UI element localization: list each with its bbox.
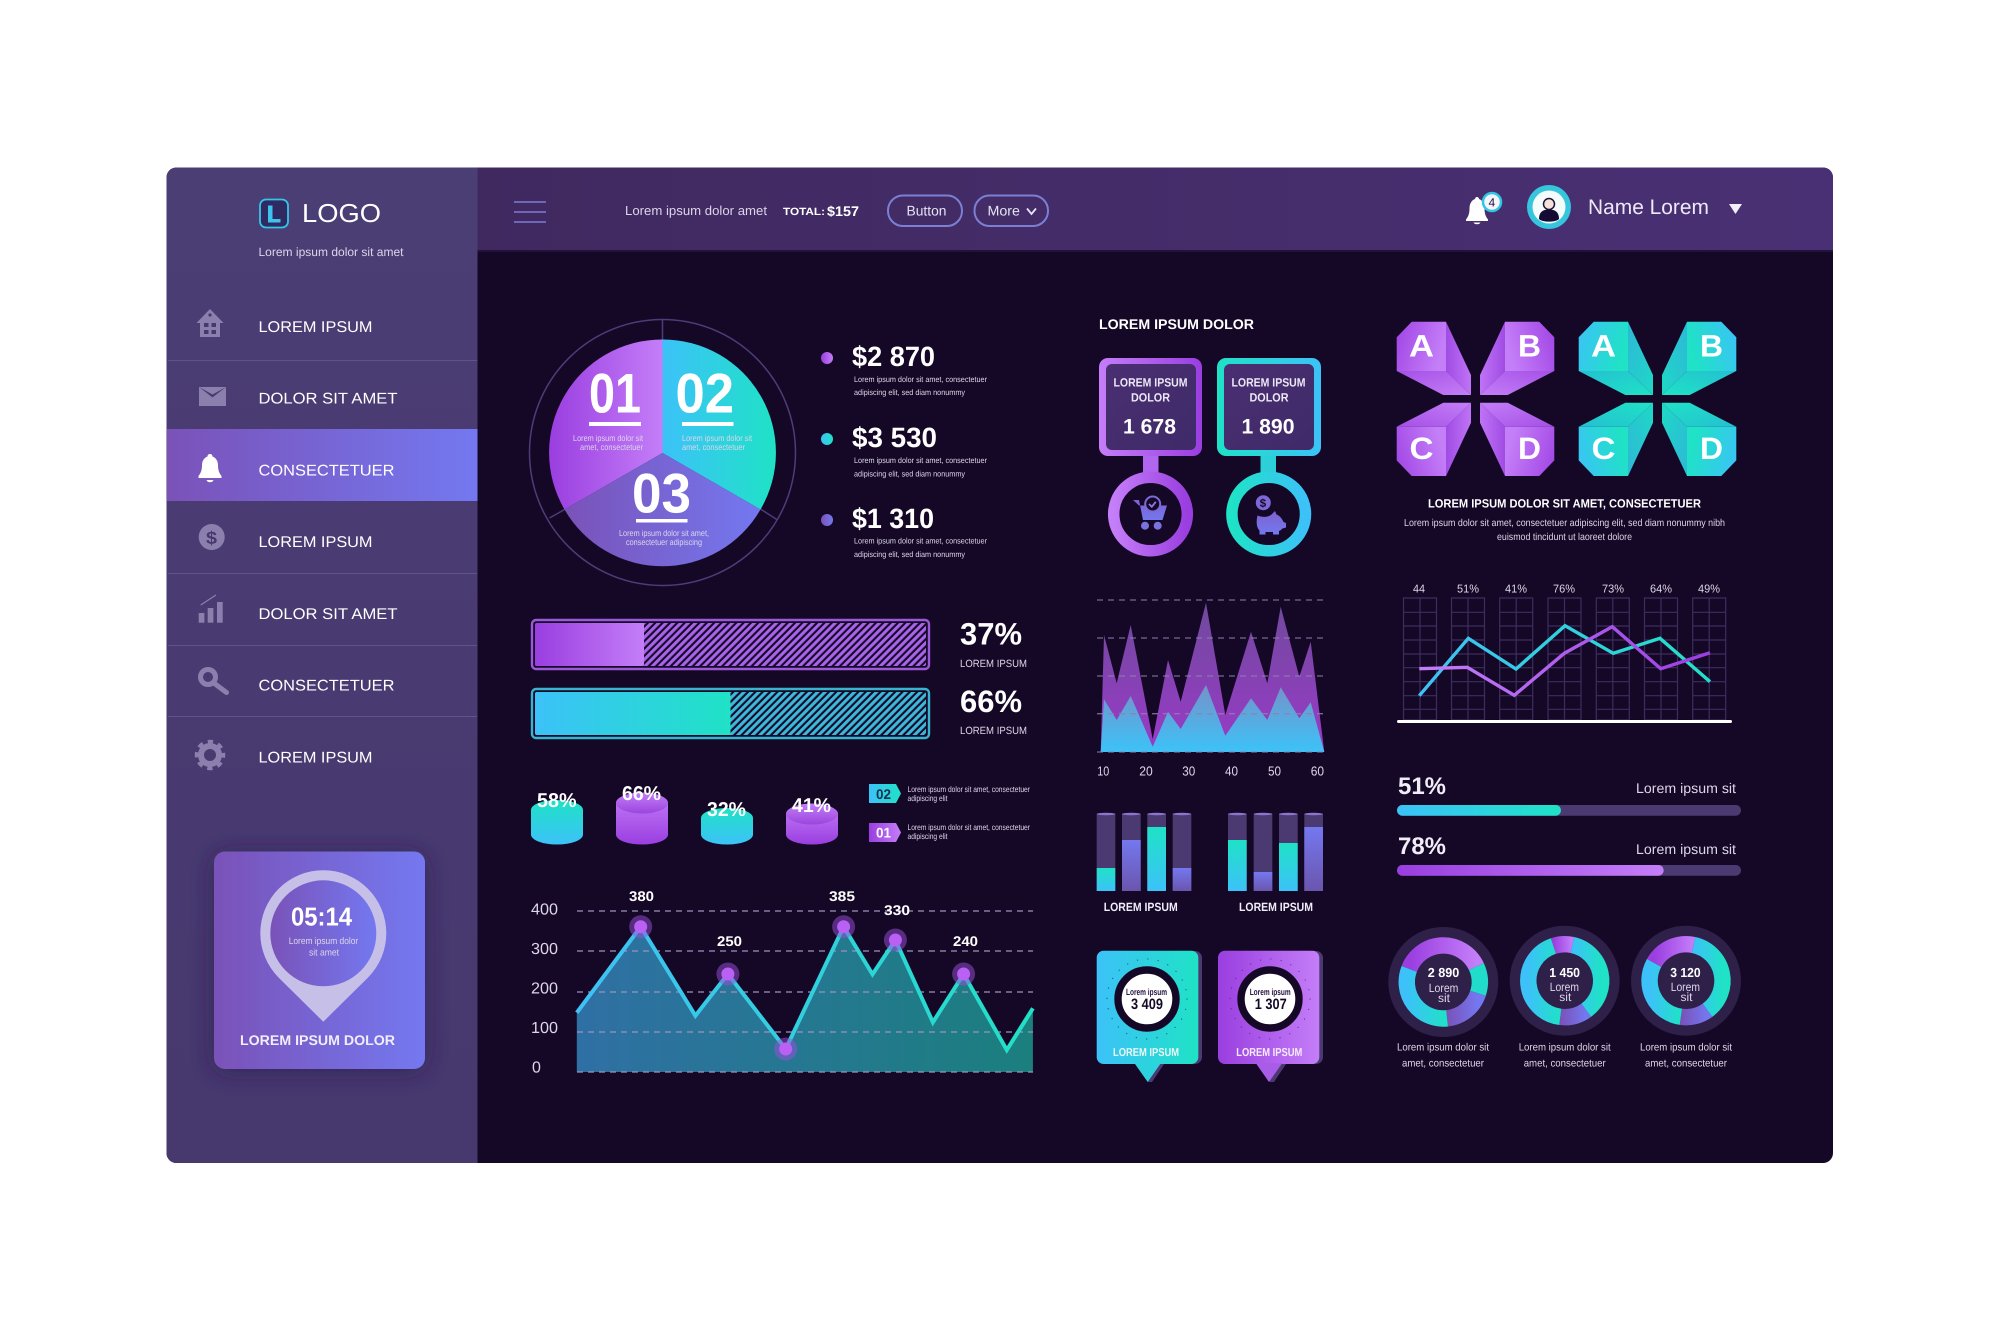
stat card: 1 678: LOREM IPSUM xyxy=(1114,376,1188,390)
pie legend: Lorem ipsum dolor sit amet, consectetuer xyxy=(854,375,987,384)
purple ABCD clover: C xyxy=(1410,431,1434,466)
slim progress: 51%: 51% xyxy=(1398,773,1446,800)
stat card: 1 678: 1 678 xyxy=(1123,416,1176,438)
donut chart: 1 450: Lorem ipsum dolor sit xyxy=(1519,1042,1611,1054)
line chart with area: 200 xyxy=(531,980,558,998)
grid line chart: 51% xyxy=(1457,584,1479,596)
cylinder 41% xyxy=(786,795,838,845)
icon: bell xyxy=(198,454,222,482)
cylinder 58%: 58% xyxy=(537,790,577,812)
pie legend: $3 530 xyxy=(852,422,937,453)
panel: dashboard shell xyxy=(166,167,1834,1163)
active menu highlight xyxy=(167,429,478,501)
icon: magnifier xyxy=(200,670,226,692)
progress bar: 37% xyxy=(532,616,1027,670)
area chart: 30 xyxy=(1182,764,1195,778)
pie slice 03 xyxy=(564,453,760,566)
donut chart: 2 890: Lorem ipsum dolor sit xyxy=(1397,1042,1489,1054)
purple ABCD clover: B xyxy=(1518,328,1541,364)
icon: gear xyxy=(197,742,223,768)
teal ABCD clover: C xyxy=(1592,431,1616,466)
line chart with area: 240 xyxy=(953,933,978,949)
donut chart: 3 120: Lorem ipsum dolor sit xyxy=(1640,1042,1732,1054)
pie chart xyxy=(530,320,796,586)
line chart with area: 100 xyxy=(531,1020,558,1037)
pin card: 1 307: 1 307 xyxy=(1255,996,1287,1013)
progress bar: 66%: 66% xyxy=(960,684,1022,719)
cylinder legend xyxy=(869,784,1030,842)
area chart: 60 xyxy=(1311,764,1324,778)
cylinder legend: adipiscing elit xyxy=(908,832,948,841)
bar group 1: LOREM IPSUM xyxy=(1104,900,1178,914)
stat card: 1 678 xyxy=(1099,358,1202,551)
more dropdown button xyxy=(974,196,1048,226)
donut chart: 3 120: 3 120 xyxy=(1670,965,1701,980)
line chart with area: 0 xyxy=(532,1060,541,1076)
icon: envelope xyxy=(199,387,226,406)
area chart: 40 xyxy=(1225,764,1238,778)
cylinder legend: 01 xyxy=(876,824,891,840)
pin card: 3 409: LOREM IPSUM xyxy=(1113,1047,1179,1059)
purple ABCD clover xyxy=(1397,322,1554,476)
line chart with area: 300 xyxy=(531,941,558,958)
sidebar menu xyxy=(167,309,478,768)
progress bar: 66%: LOREM IPSUM xyxy=(960,725,1027,737)
panel: timer pin card: Lorem ipsum dolor xyxy=(289,936,358,947)
icon: user avatar xyxy=(1527,185,1571,229)
pie legend: Lorem ipsum dolor sit amet, consectetuer xyxy=(854,536,987,546)
grid line chart: 76% xyxy=(1553,584,1575,596)
stat card: 1 890: LOREM IPSUM xyxy=(1232,376,1306,390)
line chart with area xyxy=(531,888,1033,1076)
bar group 2: LOREM IPSUM xyxy=(1239,900,1313,914)
pin card: 3 409: Lorem ipsum xyxy=(1126,987,1167,997)
cylinder 58% xyxy=(531,790,583,845)
pie legend: adipiscing elit, sed diam nonummy xyxy=(854,388,965,397)
menu labels xyxy=(258,319,398,766)
header controls: Name Lorem xyxy=(1588,196,1709,219)
dashboard infographic xyxy=(166,168,1833,1163)
pie chart: amet, consectetuer xyxy=(682,442,745,452)
progress bar: 37%: 37% xyxy=(960,616,1022,652)
pin card: 1 307: LOREM IPSUM xyxy=(1236,1047,1302,1059)
menu labels: LOREM IPSUM xyxy=(258,319,372,336)
donut chart: 2 890: amet, consectetuer xyxy=(1402,1058,1484,1070)
line chart with area: 380 xyxy=(629,888,654,904)
icon: dollar coin xyxy=(199,524,225,550)
slim progress: 78% xyxy=(1397,833,1741,876)
cylinder chart xyxy=(531,783,838,845)
pie chart: Lorem ipsum dolor sit amet, xyxy=(619,528,709,538)
slim progress: 78%: 78% xyxy=(1398,833,1446,860)
dropdown arrow xyxy=(1729,204,1742,214)
cylinder 41%: 41% xyxy=(792,795,831,817)
cylinder 66%: 66% xyxy=(622,783,661,805)
stat card: 1 890 xyxy=(1217,358,1321,551)
pie legend: adipiscing elit, sed diam nonummy xyxy=(854,550,965,559)
menu labels: CONSECTETUER xyxy=(258,462,394,480)
donut chart: 3 120 xyxy=(1631,926,1741,1070)
grid line chart: 49% xyxy=(1698,584,1720,596)
icon: notification bell xyxy=(1466,193,1501,224)
pin card: 1 307 xyxy=(1218,951,1323,1082)
logo: Lorem ipsum dolor sit amet xyxy=(258,245,404,259)
panel: timer pin card: LOREM IPSUM DOLOR xyxy=(240,1032,395,1048)
stat card: 1 890: DOLOR xyxy=(1250,390,1289,404)
cylinder legend: adipiscing elit xyxy=(908,794,948,803)
area chart: 10 xyxy=(1097,764,1109,778)
icon: hamburger menu xyxy=(514,201,546,223)
pie legend xyxy=(821,341,987,559)
area chart: 50 xyxy=(1268,764,1281,778)
panel: timer pin card xyxy=(214,852,425,1069)
logo: LOGO xyxy=(302,198,381,228)
logo xyxy=(258,198,404,259)
cylinder legend: Lorem ipsum dolor sit amet, consectetuer xyxy=(908,785,1030,794)
donut chart: 3 120: Lorem xyxy=(1671,980,1700,994)
donut chart: 2 890 xyxy=(1388,927,1498,1070)
panel: sidebar background xyxy=(166,167,478,1163)
donut chart: 1 450: Lorem xyxy=(1550,980,1579,994)
heading: LOREM IPSUM DOLOR xyxy=(1099,316,1254,332)
stat card: 1 890: 1 890 xyxy=(1242,416,1294,438)
header controls: TOTAL: xyxy=(783,206,825,218)
pie legend: adipiscing elit, sed diam nonummy xyxy=(854,470,965,478)
header controls: Lorem ipsum dolor amet xyxy=(625,203,767,218)
pie chart: consectetuer adipiscing xyxy=(626,537,702,547)
donut chart: 1 450: amet, consectetuer xyxy=(1524,1058,1606,1070)
menu labels: DOLOR SIT AMET xyxy=(258,606,398,623)
cylinder 66% xyxy=(616,783,668,845)
menu labels: DOLOR SIT AMET xyxy=(258,390,398,408)
teal ABCD clover: A xyxy=(1591,328,1616,364)
slim progress: 51%: Lorem ipsum sit xyxy=(1636,780,1736,796)
panel: top header bar xyxy=(478,167,1834,250)
donut chart: 2 890: Lorem xyxy=(1429,981,1458,995)
pie chart: 02 xyxy=(676,362,734,424)
menu labels: LOREM IPSUM xyxy=(258,534,372,551)
line chart with area: 250 xyxy=(717,933,742,949)
grid line chart: 64% xyxy=(1650,584,1672,596)
pie slice 02 xyxy=(662,339,776,510)
pie chart: Lorem ipsum dolor sit xyxy=(573,433,644,443)
teal ABCD clover: D xyxy=(1700,431,1723,466)
icon: piggy bank ring: $ xyxy=(1260,498,1267,510)
panel: timer pin card: sit amet xyxy=(309,948,339,958)
pie chart: 01 xyxy=(589,362,641,424)
donut chart: 1 450: sit xyxy=(1559,990,1572,1004)
button: Button xyxy=(906,202,946,218)
icon: map pin xyxy=(260,870,386,1022)
donut chart: 1 450: 1 450 xyxy=(1549,965,1580,980)
stat card: 1 678: DOLOR xyxy=(1131,390,1170,404)
grid line chart xyxy=(1397,584,1732,723)
button xyxy=(888,196,962,226)
slim progress: 78%: Lorem ipsum sit xyxy=(1636,841,1736,857)
progress bar: 66% xyxy=(532,684,1027,738)
clover caption: Lorem ipsum dolor sit amet, consectetuer adipiscing elit, sed diam nonummy nibh xyxy=(1404,518,1725,529)
donut chart: 3 120: sit xyxy=(1680,990,1693,1004)
header controls: $157 xyxy=(827,203,859,219)
cylinder legend: Lorem ipsum dolor sit amet, consectetuer xyxy=(908,823,1030,832)
clover caption: euismod tincidunt ut laoreet dolore xyxy=(1497,532,1632,543)
area chart xyxy=(1097,600,1324,778)
donut chart: 2 890: sit xyxy=(1438,991,1451,1005)
icon: bar chart xyxy=(199,595,223,623)
bar group 2 xyxy=(1228,813,1323,914)
pin card: 1 307: Lorem ipsum xyxy=(1250,987,1291,997)
slim progress: 51% xyxy=(1397,773,1741,816)
donut chart: 2 890: 2 890 xyxy=(1428,965,1459,980)
bar group 1 xyxy=(1097,813,1191,914)
line chart with area: 385 xyxy=(829,888,855,904)
pin card: 3 409 xyxy=(1097,951,1202,1082)
icon: notification bell: 4 xyxy=(1488,196,1496,210)
area chart: 20 xyxy=(1139,764,1153,778)
purple ABCD clover: D xyxy=(1518,431,1541,466)
teal ABCD clover: B xyxy=(1700,328,1723,364)
cylinder 32% xyxy=(701,799,753,845)
line chart with area: 400 xyxy=(531,902,558,918)
menu labels: CONSECTETUER xyxy=(258,678,394,694)
progress bar: 37%: LOREM IPSUM xyxy=(960,658,1027,670)
clover caption xyxy=(1404,496,1725,543)
cylinder legend: 02 xyxy=(876,786,891,802)
donut chart: 1 450 xyxy=(1510,926,1620,1070)
grid line chart: 41% xyxy=(1505,584,1527,596)
pie chart: Lorem ipsum dolor sit xyxy=(682,433,753,443)
pie chart: amet, consectetuer xyxy=(580,442,643,452)
menu labels: LOREM IPSUM xyxy=(258,750,372,766)
icon: cart ring xyxy=(1114,477,1187,551)
pie legend: $2 870 xyxy=(852,341,935,372)
pie slice 01 xyxy=(549,339,662,510)
grid line chart: 73% xyxy=(1602,584,1624,596)
donut chart: 3 120: amet, consectetuer xyxy=(1645,1058,1727,1070)
purple ABCD clover: A xyxy=(1409,328,1434,364)
more dropdown button: More xyxy=(988,202,1020,218)
pin card: 3 409: 3 409 xyxy=(1131,996,1163,1013)
icon: dollar coin: $ xyxy=(206,528,217,548)
icon: piggy bank ring xyxy=(1232,477,1305,551)
grid line chart: 44 xyxy=(1413,584,1426,596)
pie legend: $1 310 xyxy=(852,503,934,534)
cylinder 32%: 32% xyxy=(707,799,746,821)
clover caption: LOREM IPSUM DOLOR SIT AMET, CONSECTETUER xyxy=(1428,496,1701,510)
pie legend: Lorem ipsum dolor sit amet, consectetuer xyxy=(854,456,987,465)
pie chart: 03 xyxy=(632,462,691,524)
line chart with area: 330 xyxy=(884,902,910,918)
panel: timer pin card: 05:14 xyxy=(291,902,352,932)
teal ABCD clover xyxy=(1579,322,1736,476)
header controls xyxy=(514,185,1742,229)
icon: house xyxy=(196,309,224,337)
